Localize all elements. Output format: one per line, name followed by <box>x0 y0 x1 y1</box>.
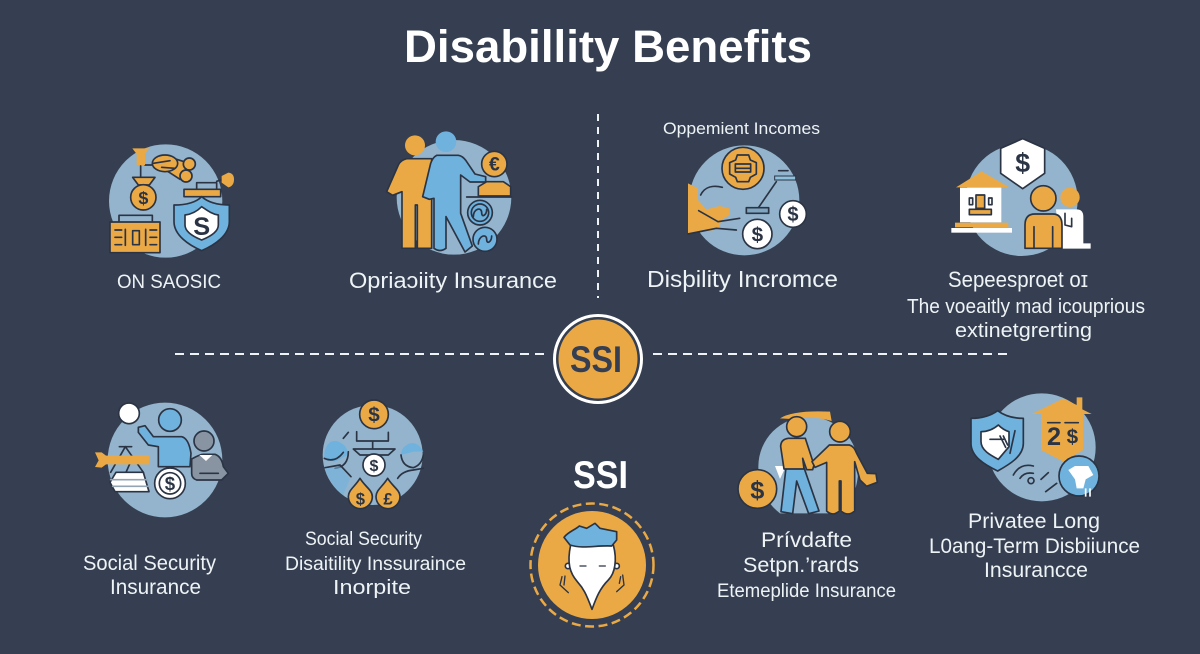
label line 2: L0ang-Term Disbiiunce <box>929 535 1140 558</box>
icon: money funnel, shield and briefcase: $ <box>138 188 148 208</box>
icon: person with gear and dollar coins: $ <box>787 204 799 226</box>
label: Disþility Incromce <box>647 266 838 292</box>
panel: bottom row item 2 <box>285 400 466 599</box>
label line 1: Privatee Long <box>968 510 1100 533</box>
icon: shield, house and badge: 2 <box>1047 423 1061 451</box>
icon: people, scales and coins: $ <box>370 458 379 475</box>
icon: people, basket and coin <box>95 403 228 517</box>
badge: central SSI: SSI <box>570 339 622 380</box>
icon: shield, house and badge <box>971 393 1099 501</box>
label line 1: Sepeesproet oɪ <box>948 267 1088 292</box>
heading: Oppemient Incomes <box>663 119 820 138</box>
icon: shield, bank and people: $ <box>1015 148 1030 178</box>
icon: people, scales and coins: $ <box>368 404 380 427</box>
icon: shield, house and badge: $ <box>1067 425 1079 448</box>
label line 3: Insurancce <box>984 559 1088 582</box>
label line 3: Inorpite <box>333 577 411 599</box>
icon: people, basket and coin: $ <box>165 473 176 494</box>
icon: two people with dollar coin: $ <box>750 476 764 504</box>
label line 2: Setpn.’rards <box>743 554 859 577</box>
label line 3: extinetgrerting <box>955 320 1092 342</box>
icon: people, scales and coins: £ <box>383 489 393 508</box>
panel: top row item 1 <box>109 144 234 293</box>
label line 2: The voeaitly mad icouprious <box>907 296 1145 318</box>
label: ON SAOSIC <box>117 272 221 293</box>
icon: shield, bank and people <box>951 139 1091 256</box>
panel: bottom centre SSI <box>530 454 654 626</box>
panel: top row item 2 <box>349 131 557 293</box>
badge: central SSI <box>554 316 642 402</box>
icon: person with gear and dollar coins <box>688 145 806 255</box>
icon: people, scales and coins <box>323 400 423 509</box>
icon: two people with dollar coin <box>738 411 877 514</box>
icon: two people with coins: € <box>489 155 500 176</box>
panel: top row item 3 <box>647 119 838 292</box>
panel: top row item 4 <box>907 139 1145 342</box>
label line 2: Disaitility Inssuraince <box>285 554 466 575</box>
panel: bottom row item 3 <box>717 411 896 602</box>
label line 1: Prívdafte <box>761 529 852 552</box>
icon: two people with coins <box>387 131 512 255</box>
icon: money funnel, shield and briefcase <box>109 144 234 258</box>
panel: bottom row item 1 <box>83 403 228 599</box>
label line 1: Social Security <box>305 529 422 550</box>
icon: person with gear and dollar coins: $ <box>752 223 764 246</box>
heading: SSI <box>573 454 628 497</box>
label line 1: Social Security <box>83 552 216 575</box>
icon: face in dashed ring <box>530 504 654 626</box>
label: Opriaɔiity Insurance <box>349 268 557 293</box>
label line 2: Insurance <box>110 576 201 599</box>
icon: money funnel, shield and briefcase: S <box>193 213 210 241</box>
title: Disabillity Benefits <box>404 21 812 72</box>
label line 3: Etemeplide Insurance <box>717 581 896 602</box>
icon: people, scales and coins: $ <box>356 489 366 508</box>
panel: bottom row item 4 <box>929 393 1140 582</box>
